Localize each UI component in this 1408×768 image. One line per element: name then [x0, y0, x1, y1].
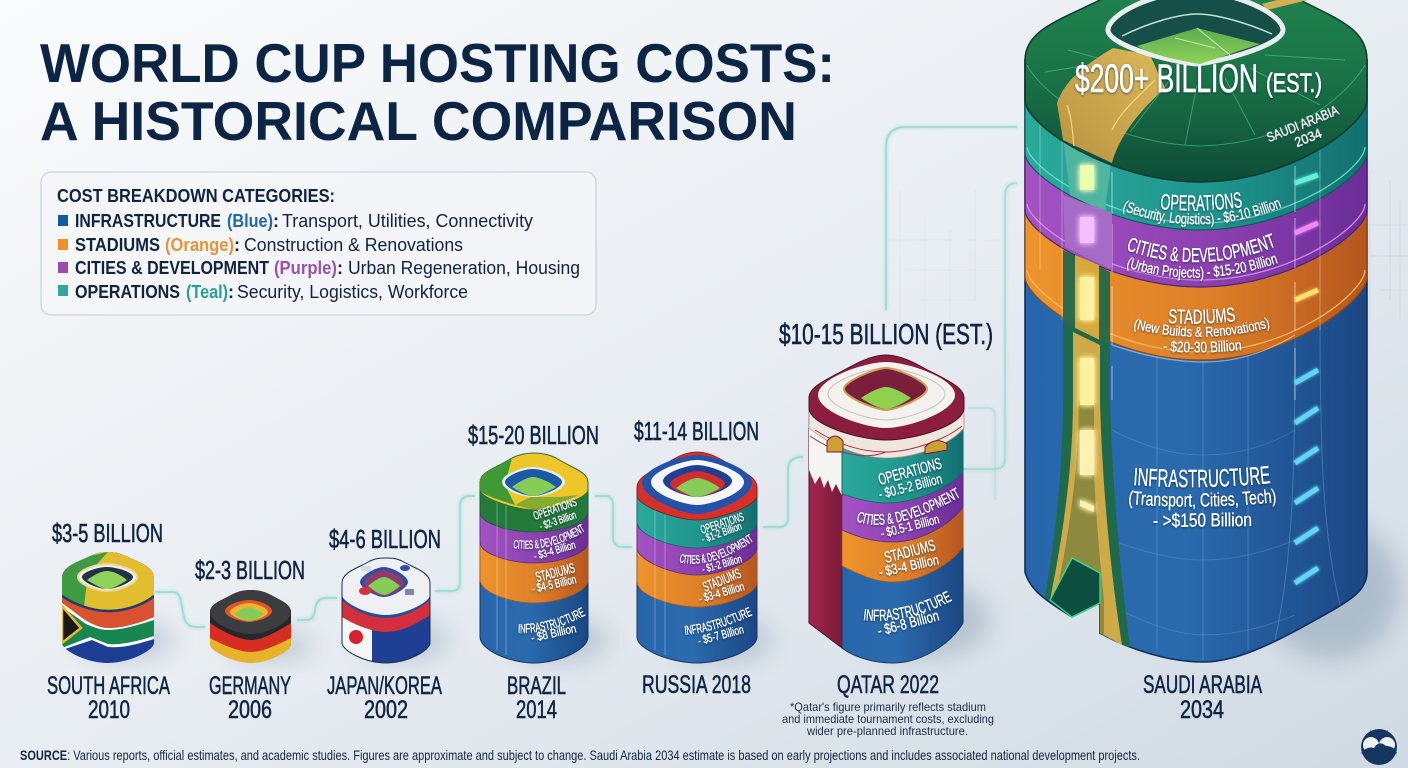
cost labels: $10-15 BILLION (EST.) [779, 319, 993, 351]
background circuit pattern [890, 170, 1408, 330]
stadium bowl [844, 368, 927, 410]
flag body [342, 597, 430, 662]
segment: cities and development [1025, 60, 1367, 287]
icon: logo [1361, 729, 1397, 765]
segment: cities and development [480, 482, 588, 563]
legend item: cities and development: Urban Regeneration, Housing [348, 258, 580, 278]
legend item: operations: (Teal) [186, 282, 228, 302]
host name labels: JAPAN/KOREA [327, 672, 442, 700]
Qatar footnote [782, 700, 994, 738]
segment labels: CITIES & DEVELOPMENT [856, 487, 960, 528]
legend item: stadiums: STADIUMS [75, 235, 160, 255]
legend item: cities and development: CITIES & DEVELOPMENT [75, 258, 269, 278]
host name labels: 2002 [364, 696, 408, 724]
segment: operations [842, 400, 963, 503]
glowing side bars [1295, 175, 1318, 583]
stadium bowl and small flags [359, 565, 414, 597]
Qatar footnote: wider pre-planned infrastructure. [806, 724, 968, 738]
segment: infrastructure [480, 482, 588, 663]
stadium bowl [502, 467, 565, 497]
segment labels: - $3-4 Billion [698, 584, 746, 604]
flag body [62, 552, 154, 663]
stadium bowl [78, 564, 137, 591]
striped crown [809, 398, 964, 458]
host label on roof [1264, 102, 1347, 159]
host name labels: GERMANY [209, 672, 291, 700]
Qatar footnote: *Qatar's figure primarily reflects stadium [790, 700, 986, 714]
tower: Russia 2018 [636, 452, 776, 672]
legend item: operations: : [228, 282, 234, 302]
segment: operations [480, 482, 588, 532]
tower: Qatar 2022 [808, 354, 997, 667]
legend item: stadiums: : [234, 235, 240, 255]
host name labels: QATAR 2022 [837, 671, 939, 699]
host label on roof: 2034 [1292, 125, 1324, 150]
legend panel: cost breakdown categories [41, 172, 596, 315]
segment labels [512, 498, 586, 643]
front panels [1112, 166, 1295, 400]
segment labels: - $3-4 Billion [534, 542, 576, 560]
title: WORLD CUP HOSTING COSTS: [40, 32, 835, 94]
tower: South Africa 2010 [62, 552, 173, 663]
segment labels: - $0.5-1 Billion [880, 516, 940, 538]
segment labels: OPERATIONS [699, 512, 745, 536]
segment labels [856, 458, 960, 636]
legend item: cities and development: : [337, 258, 343, 278]
total cost label: (EST.) [1266, 68, 1322, 98]
segment labels: - $6-8 Billion [878, 612, 940, 636]
segment labels: - $3-4 Billion [878, 556, 940, 578]
segment: operations [1025, 60, 1367, 230]
legend item: infrastructure: Transport, Utilities, Connectivity [282, 211, 533, 231]
host name labels: RUSSIA 2018 [642, 671, 751, 699]
segment: stadiums [842, 400, 963, 582]
glowing windows [1080, 165, 1094, 512]
segment: infrastructure [842, 400, 963, 663]
cost labels: $11-14 BILLION [634, 416, 759, 446]
legend item: cities and development: (Purple) [274, 258, 337, 278]
segment labels: (Transport, Cities, Tech) [1128, 488, 1277, 512]
host name labels: BRAZIL [507, 672, 566, 700]
segment labels: - $20-30 Billion [1162, 340, 1243, 355]
top face [1025, 0, 1367, 182]
segment labels: OPERATIONS [532, 498, 578, 522]
segment labels: STADIUMS [534, 562, 576, 584]
host name labels: SOUTH AFRICA [47, 672, 170, 700]
segment labels: - >$150 Billion [1152, 512, 1252, 530]
legend item: infrastructure [58, 211, 533, 231]
host name labels: 2010 [88, 696, 130, 724]
tower: Saudi Arabia 2034 [1024, 0, 1408, 668]
host name labels: 2034 [1180, 696, 1224, 724]
stadium bowl [663, 465, 732, 497]
Qatar footnote: and immediate tournament costs, excluding [782, 712, 994, 726]
segment labels: - $1-2 Billion [702, 524, 743, 544]
title: A HISTORICAL COMPARISON [40, 90, 797, 152]
segment labels: CITIES & DEVELOPMENT [512, 524, 584, 552]
segment labels: INFRASTRUCTURE [862, 590, 952, 623]
host label on roof: SAUDI ARABIA [1264, 102, 1341, 145]
gold ribbon [1057, 0, 1308, 163]
segment labels: OPERATIONS [1160, 192, 1244, 213]
host name labels [47, 671, 1262, 724]
legend item: operations: OPERATIONS [75, 282, 180, 302]
legend item: cities and development [58, 258, 580, 278]
legend item: operations [58, 282, 468, 302]
cost labels: $15-20 BILLION [468, 420, 599, 450]
segment labels: - $2-3 Billion [540, 512, 578, 530]
legend item: stadiums [58, 235, 463, 255]
stadium bowl [1108, 0, 1283, 64]
cost labels: $2-3 BILLION [195, 555, 305, 585]
host name labels: 2014 [516, 696, 557, 724]
tower: Japan/Korea 2002 [342, 558, 449, 663]
segment: cities and development [637, 487, 757, 575]
segment labels: (Urban Projects) - $15-20 Billion [1126, 256, 1278, 282]
source line: SOURCE: Various reports, official estimates, and academic studies. Figures are approximate and subject to change. Saudi Arabia 2034 estimate is based on early projections and includes associated national development projects. [20, 747, 1140, 763]
segment: infrastructure [1025, 60, 1367, 662]
segment labels: INFRASTRUCTURE [684, 606, 753, 636]
segment labels: INFRASTRUCTURE [518, 607, 586, 635]
tower: Brazil 2014 [480, 452, 614, 673]
legend item: infrastructure: : [273, 211, 279, 231]
segment: cities and development [842, 400, 963, 542]
panel lines [1040, 125, 1320, 330]
title [40, 32, 835, 152]
segment labels: INFRASTRUCTURE [1133, 466, 1272, 490]
segment labels: - $8 Billion [531, 626, 577, 643]
segment: infrastructure [637, 487, 757, 663]
legend item: stadiums: Construction & Renovations [244, 235, 463, 255]
cost labels [52, 319, 993, 585]
segment labels [1122, 192, 1282, 530]
segment: stadiums [637, 487, 757, 607]
top rim [480, 453, 588, 510]
segment labels: STADIUMS [701, 568, 742, 594]
segment labels: - $1-2 Billion [702, 556, 743, 574]
segment labels: CITIES & DEVELOPMENT [1126, 233, 1274, 264]
segment labels: - $4-5 Billion [532, 576, 578, 594]
flag body [210, 590, 291, 663]
legend item: infrastructure: INFRASTRUCTURE [75, 211, 221, 231]
segment: stadiums [480, 482, 588, 603]
top face detail lines [1027, 50, 1365, 146]
cost labels: $4-6 BILLION [329, 524, 441, 554]
top rim [637, 452, 757, 520]
segment labels: CITIES & DEVELOPMENT [678, 534, 753, 566]
stadium bowl [225, 600, 272, 622]
segment labels: - $5-7 Billion [698, 626, 744, 646]
segment labels: (Security, Logistics) - $6-10 Billion [1122, 200, 1282, 229]
segment labels [678, 512, 753, 646]
total cost label: $200+ BILLION [1075, 57, 1258, 101]
maroon roof [809, 355, 964, 440]
central spine [1045, 135, 1130, 648]
connector lines between hosts [155, 127, 1017, 627]
flag panel [809, 398, 842, 648]
legend item: infrastructure: (Blue) [227, 211, 273, 231]
host name labels: 2006 [228, 696, 272, 724]
host name labels: SAUDI ARABIA [1143, 671, 1262, 699]
segment labels: OPERATIONS [877, 458, 943, 487]
legend item: stadiums: (Orange) [165, 235, 234, 255]
segment labels: (New Builds & Renovations) [1132, 318, 1271, 340]
legend item: operations: Security, Logistics, Workforce [237, 282, 468, 302]
segment labels: STADIUMS [883, 539, 937, 565]
segment labels: STADIUMS [1168, 307, 1236, 326]
segment: operations [637, 487, 757, 548]
segment labels: - $0.5-2 Billion [878, 476, 944, 500]
tower: Germany 2006 [210, 590, 312, 663]
legend panel: cost breakdown categories: COST BREAKDOWN CATEGORIES: [57, 186, 335, 206]
segment: stadiums [1025, 60, 1367, 360]
cost labels: $3-5 BILLION [52, 518, 163, 548]
